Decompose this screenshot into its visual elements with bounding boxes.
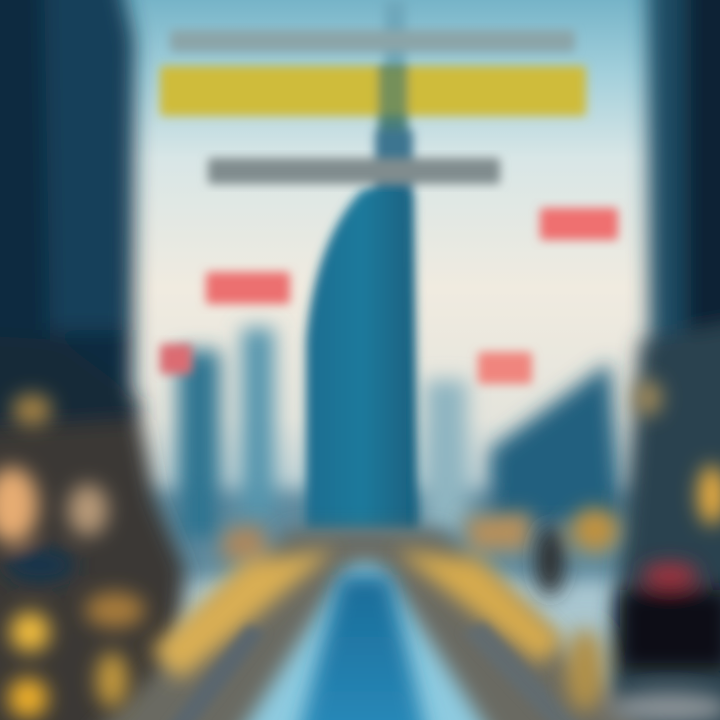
- left dark buildings: [0, 0, 185, 720]
- heading: first line band: [170, 30, 575, 52]
- golden light streaks: [150, 512, 565, 680]
- dark road stripes: [165, 622, 585, 720]
- background towers: distant skyline: [130, 328, 650, 580]
- city lights: left: [0, 394, 145, 718]
- road centre: [295, 575, 430, 720]
- heading: yellow highlighted band: [160, 66, 586, 116]
- callout: red label far left: [160, 344, 192, 374]
- road reflection: [230, 562, 500, 720]
- central skyscraper: [306, 0, 418, 530]
- callout: red label left: [206, 272, 290, 304]
- street: [80, 530, 670, 720]
- subheading: grey band: [208, 158, 500, 184]
- city lights: right: [536, 380, 720, 720]
- right dark buildings: [600, 0, 720, 720]
- callout: red label centre right: [478, 352, 532, 384]
- callout: red label upper right: [540, 208, 618, 240]
